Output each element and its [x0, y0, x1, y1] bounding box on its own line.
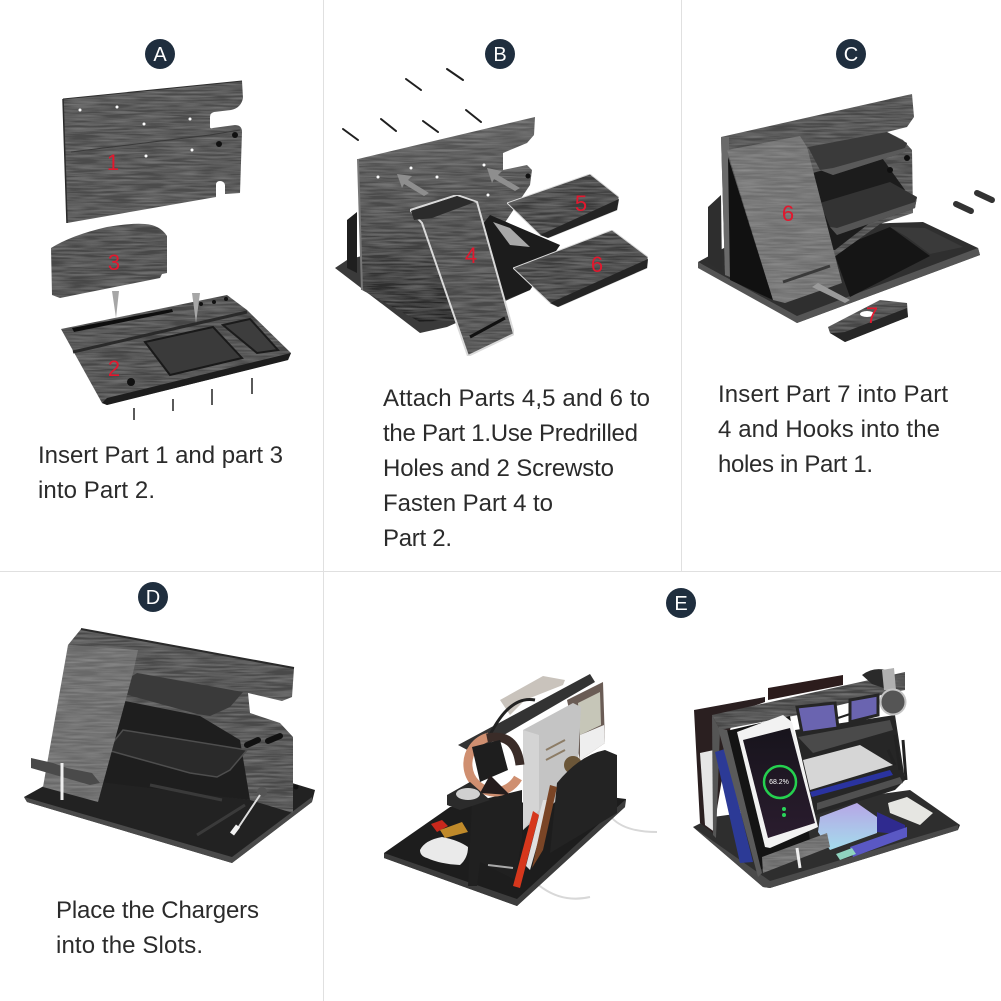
part 1: back board: 1 — [107, 150, 119, 175]
text: step C: 4 and Hooks into the — [718, 416, 940, 443]
base tray — [698, 222, 980, 323]
watch — [862, 668, 906, 714]
back board — [68, 629, 294, 813]
text: step C: Insert Part 7 into Part — [718, 381, 948, 408]
hardware bits — [493, 222, 530, 247]
base tray — [24, 777, 315, 863]
pens — [513, 785, 557, 888]
panel: step B — [335, 39, 650, 552]
text: step A: Insert Part 1 and part 3 — [38, 442, 283, 469]
part 5: shelf — [507, 174, 619, 238]
panel: step A — [38, 39, 291, 504]
part 4: phone stand: 4 — [465, 243, 477, 268]
text: step B: Fasten Part 4 to — [383, 490, 553, 517]
part 4: phone stand — [410, 195, 514, 356]
text: step B — [383, 385, 650, 552]
shelf: upper — [110, 673, 243, 716]
curved divider — [550, 750, 617, 853]
pins — [956, 193, 992, 211]
sticky notes — [818, 803, 877, 850]
arrow — [812, 283, 850, 303]
back bar — [458, 674, 595, 753]
badge E: E — [674, 593, 688, 615]
tray — [693, 790, 960, 888]
shelf: upper — [808, 132, 907, 175]
text: step B: Holes and 2 Screwsto — [383, 455, 614, 482]
part 4: light wood stand, labelled 6: 6 — [782, 201, 794, 226]
upper shelf — [798, 720, 893, 753]
centre stand — [468, 790, 522, 886]
blue book — [715, 749, 753, 863]
organizer front view — [693, 668, 960, 888]
text: step C: holes in Part 1. — [718, 451, 873, 478]
badge C — [836, 39, 866, 69]
badge D: D — [146, 587, 160, 609]
phone: 68.2% — [769, 779, 789, 786]
part 3: curved divider — [51, 224, 167, 298]
phone — [737, 715, 818, 848]
panel: step D — [24, 582, 315, 959]
part 6: shelf — [513, 230, 648, 307]
text: step C — [718, 381, 948, 478]
shelf interior — [795, 715, 905, 815]
arrows down — [112, 291, 200, 323]
part 3: left divider — [708, 195, 722, 272]
part 7: 7 — [866, 303, 878, 328]
glasses and pen — [490, 676, 565, 735]
arrows — [397, 168, 520, 196]
part 2: base tray — [61, 295, 291, 405]
tray interior — [470, 215, 560, 310]
part 2: base tray: 2 — [108, 356, 120, 381]
blue pen — [810, 770, 893, 797]
stand frame — [718, 728, 762, 877]
text: step B: Attach Parts 4,5 and 6 to — [383, 385, 650, 412]
text: step D — [56, 897, 259, 959]
small tag — [836, 848, 856, 860]
part 6: shelf: 6 — [591, 252, 603, 277]
text: step B: the Part 1.Use Predrilled — [383, 420, 638, 447]
badge B: B — [493, 44, 507, 66]
charger cable — [488, 865, 513, 868]
red pouch and tray items — [431, 820, 468, 838]
dark interior — [728, 157, 773, 300]
part 4: light wood stand — [43, 645, 138, 802]
text: step D: into the Slots. — [56, 932, 203, 959]
keys — [888, 735, 906, 780]
shelf: lower — [820, 182, 917, 235]
watch — [468, 737, 520, 795]
earbud case — [888, 797, 933, 825]
badge D — [138, 582, 168, 612]
base and left divider — [335, 212, 560, 333]
badge A — [145, 39, 175, 69]
purple box — [877, 812, 905, 835]
charger bracket — [762, 833, 830, 873]
text: step B: Part 2. — [383, 525, 452, 552]
badge E — [666, 588, 696, 618]
screws — [343, 69, 481, 140]
text: step D: Place the Chargers — [56, 897, 259, 924]
charger clip — [31, 758, 100, 800]
book — [523, 703, 582, 830]
part 1: back board — [358, 117, 535, 322]
part 4: light wood stand, labelled 6 — [727, 136, 842, 303]
part 7 — [828, 300, 908, 342]
badge B — [485, 39, 515, 69]
panel: step E — [384, 588, 960, 906]
part 3: curved divider: 3 — [108, 250, 120, 275]
text: step A — [38, 442, 283, 504]
part 5: shelf: 5 — [575, 191, 587, 216]
screws — [134, 378, 252, 420]
organizer side view — [384, 674, 657, 906]
badge C: C — [844, 44, 858, 66]
earbud case — [420, 837, 468, 865]
papers — [803, 745, 893, 790]
glasses — [797, 695, 878, 733]
text: step A: into Part 2. — [38, 477, 155, 504]
lower shelf — [817, 777, 903, 810]
tube — [850, 827, 907, 857]
pins and groove — [150, 736, 280, 835]
badge A: A — [153, 44, 167, 66]
dark interior — [100, 700, 250, 800]
upper books — [768, 675, 843, 700]
lower shelf and charger — [447, 782, 490, 810]
panel: step C — [698, 39, 992, 478]
tray — [384, 797, 626, 906]
cables — [528, 818, 657, 899]
back bar and left strip — [712, 672, 905, 870]
rear book — [694, 697, 765, 833]
shelf: lower — [107, 730, 247, 777]
part 1: back board — [63, 81, 243, 223]
right cable — [232, 787, 267, 834]
part 1: back board — [721, 94, 914, 290]
calculator — [567, 682, 605, 760]
